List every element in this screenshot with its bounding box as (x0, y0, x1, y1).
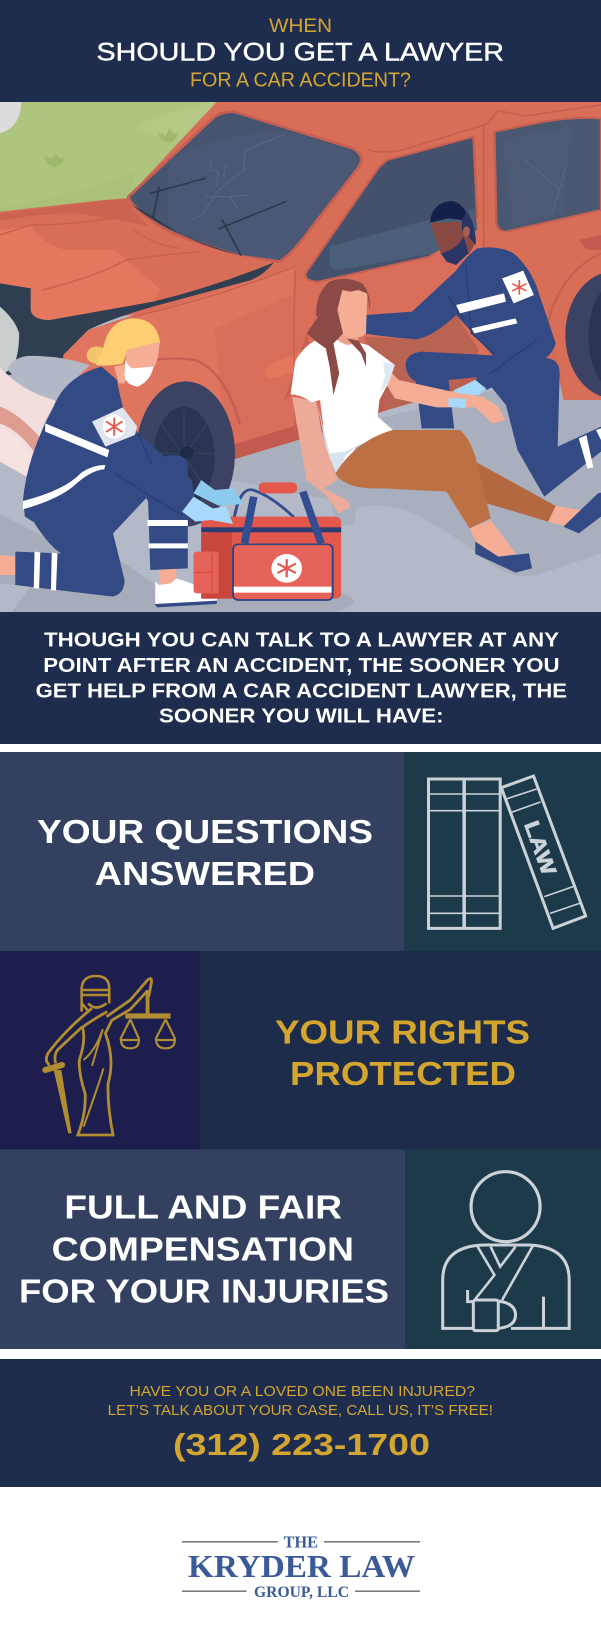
logo: the kryder law group: GROUP, LLC (254, 1584, 349, 1601)
illustration: paramedics helping a woman beside a crashed car (0, 100, 601, 613)
heading: PROTECTED (290, 1056, 516, 1093)
title line: should you get a lawyer: SHOULD YOU GET A LAWYER (96, 39, 504, 67)
panel: call to action (0, 1359, 601, 1487)
foot and shoe (470, 520, 516, 557)
car body (0, 102, 601, 483)
heading: FOR YOUR INJURIES (19, 1273, 389, 1310)
ankle and shoe (159, 568, 176, 585)
rear side window (494, 118, 601, 232)
hair, face, mask (86, 346, 103, 364)
panel: your questions answered (0, 752, 601, 951)
heading (19, 1190, 389, 1310)
wipers (150, 178, 286, 255)
panel: full and fair compensation (0, 1150, 601, 1349)
armband (92, 407, 137, 447)
heading (275, 1014, 530, 1093)
front wheel and arch (157, 358, 241, 424)
heading: YOUR RIGHTS (275, 1014, 530, 1051)
shirt (291, 340, 395, 477)
skin back foot (0, 555, 15, 575)
windshield (128, 112, 361, 262)
legs (406, 352, 601, 497)
panel: call to action: HAVE YOU OR A LOVED ONE BEEN INJURED? (130, 1383, 475, 1400)
bag back handle (234, 490, 293, 520)
panel: intro text: GET HELP FROM A CAR ACCIDENT LAWYER, THE (36, 681, 567, 703)
dark wheel bay and wedge under hood (0, 262, 274, 377)
icon: person with arm sling (443, 1172, 569, 1331)
panel: call to action: LET’S TALK ABOUT YOUR CASE, CALL US, IT’S FREE! (108, 1402, 493, 1419)
heading: COMPENSATION (52, 1231, 354, 1268)
panel: title header (0, 0, 601, 102)
armband (502, 271, 534, 303)
heading: FULL AND FAIR (64, 1190, 342, 1227)
bag (201, 517, 341, 599)
grass (0, 102, 217, 212)
heading (37, 814, 373, 893)
logo: the kryder law group (182, 1533, 420, 1601)
title line: when: WHEN (269, 16, 332, 37)
woman (291, 279, 601, 573)
hood (30, 198, 126, 320)
torso and arms (364, 247, 556, 390)
front shin (148, 455, 188, 570)
logo: the kryder law group: THE (284, 1533, 318, 1552)
logo: the kryder law group: KRYDER LAW (188, 1548, 415, 1584)
rear wheel (548, 253, 601, 320)
panel: intro text: POINT AFTER AN ACCIDENT, THE SOONER YOU (43, 655, 560, 677)
shadow on door behind woman (364, 315, 479, 410)
heading: YOUR QUESTIONS (37, 814, 373, 851)
head (430, 222, 475, 256)
back leg (15, 473, 148, 597)
panel: your rights protected (0, 951, 601, 1150)
fender and door (63, 329, 91, 358)
neck (114, 364, 126, 384)
right paramedic (364, 201, 601, 497)
icon: lady justice (45, 976, 175, 1135)
trousers (335, 430, 491, 528)
title line: for a car accident: FOR A CAR ACCIDENT? (190, 69, 411, 91)
arms (292, 397, 351, 513)
phone number: (312) 223-1700 (173, 1427, 430, 1462)
roof crease (367, 104, 601, 248)
left paramedic (0, 318, 341, 607)
far leg (471, 462, 556, 522)
panel: intro text: THOUGH YOU CAN TALK TO A LAWYER AT ANY (44, 630, 560, 652)
neck and face (338, 334, 358, 345)
heading: ANSWERED (95, 856, 315, 893)
ground (0, 100, 601, 613)
panel: intro text: SOONER YOU WILL HAVE: (159, 706, 444, 728)
gloves (194, 480, 243, 506)
icon: law books: LAW (519, 818, 560, 879)
glove (454, 380, 486, 395)
panel: intro text (0, 612, 601, 744)
torso and arm (23, 367, 195, 525)
side window (305, 137, 477, 282)
icon: law books (429, 776, 586, 928)
hair (307, 279, 370, 395)
wrist cuff (448, 398, 466, 408)
smoke and debris (0, 307, 19, 377)
